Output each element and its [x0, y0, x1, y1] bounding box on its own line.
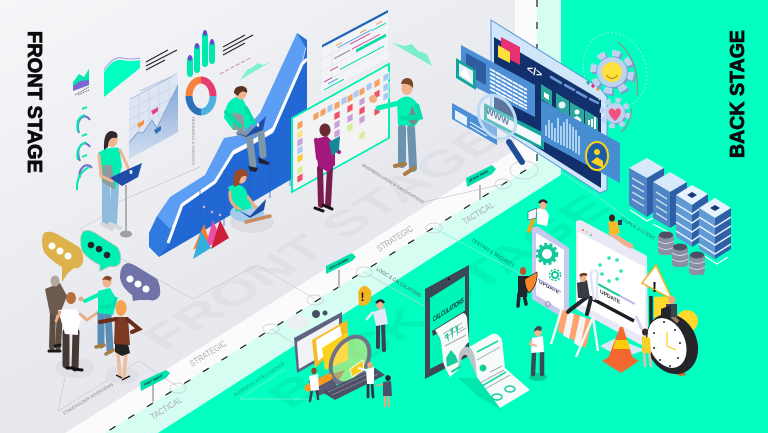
floor labels: STRATEGIC — [375, 223, 415, 254]
traffic cone — [602, 327, 639, 373]
icon: yellow and pink windows — [498, 37, 520, 65]
icon: warning bubble: ! — [360, 290, 364, 304]
keyboard — [322, 368, 385, 400]
person: grey-haired man — [45, 276, 67, 351]
icon: warning bubble — [358, 286, 371, 306]
chart: blue staircase growth graph — [149, 33, 307, 257]
floor labels: STRATEGIC — [188, 338, 228, 369]
magnifying glass — [471, 89, 523, 162]
barrier — [551, 305, 598, 357]
server stack 4 — [699, 198, 731, 259]
person: on clock — [661, 296, 678, 322]
floor labels: TESTING & SECURITY — [470, 238, 516, 270]
orange cylinder — [308, 377, 329, 388]
phone: update app: UPDATE — [539, 279, 559, 296]
phone: calculations — [425, 265, 469, 379]
spinner — [598, 256, 623, 283]
server rack 2 — [653, 172, 687, 228]
person: woman in yellow — [642, 328, 651, 366]
heading: FRONT STAGE: FRONT STAGE — [23, 31, 45, 173]
database cylinders — [658, 232, 705, 275]
signpost: centre — [326, 253, 356, 288]
icon: image tile — [456, 58, 476, 90]
floor labels — [62, 117, 656, 422]
panel: sticky note board — [292, 64, 389, 192]
chart: sparkline — [220, 57, 272, 80]
chart: donut — [189, 80, 213, 112]
search bar — [484, 103, 544, 150]
floor labels: SOURCE SYSTEMS — [619, 216, 656, 241]
floor labels: TACTICAL — [149, 395, 184, 422]
folder computer — [287, 310, 385, 400]
floor labels: STAKEHOLDER INTERVIEWS — [62, 382, 114, 416]
magnifying lens — [323, 330, 377, 390]
icon: gears — [573, 24, 657, 132]
speech bubble: green — [81, 231, 121, 271]
person: man in blue shirt — [366, 300, 388, 350]
person: man sitting on stairs — [224, 86, 270, 172]
clock with warning sign — [636, 265, 707, 382]
signpost: centre: HIGH-DOWN — [329, 257, 348, 271]
icon: colored triangles — [193, 206, 229, 259]
icon tiles — [541, 84, 598, 132]
signpost: right — [466, 165, 496, 200]
signpost: left: FAST SIGHT — [144, 373, 163, 387]
panel: code monitor — [452, 20, 620, 193]
chart: small area — [73, 69, 89, 95]
signpost: right: QUICK PEEK — [469, 169, 489, 183]
person: woman on monitor top — [608, 214, 631, 246]
clock with warning sign: ! — [652, 279, 657, 296]
floor outlines — [630, 210, 728, 264]
person: woman holding tablet — [529, 326, 547, 381]
person: man presenting — [369, 78, 421, 174]
dashboard chart panel — [541, 100, 620, 183]
phone: update app — [532, 226, 569, 318]
search bar: WWW — [486, 105, 509, 128]
navigation pills — [551, 77, 598, 103]
chart: line chart panel — [129, 74, 178, 159]
phone: calculations: CALCULATIONS — [433, 295, 464, 324]
monitor: update screen: UPDATE — [600, 289, 620, 306]
progress bar — [596, 283, 620, 296]
chat panel — [452, 103, 497, 145]
chart: green column bars — [188, 30, 253, 74]
person: guard with shield — [518, 267, 537, 306]
person: man in green shirt — [78, 276, 117, 354]
person: woman with skirt — [376, 375, 392, 407]
server rack 1 — [629, 158, 664, 217]
paper printout — [435, 313, 530, 410]
window control dots — [586, 81, 600, 91]
floor labels: RESEARCH & INSIGHTS — [191, 117, 196, 165]
server stack 3 — [676, 185, 708, 247]
floor labels: BUSINESS LOGIC & CALCULATIONS — [361, 163, 425, 205]
heading: BACK STAGE: BACK STAGE — [727, 30, 749, 158]
person: wrench mechanic — [568, 270, 598, 314]
chart: gantt panel — [322, 10, 388, 93]
watermark: FRONT STAGE: FRONT STAGE — [130, 118, 513, 357]
floor labels: TACTICAL — [461, 200, 496, 227]
code symbol: </> — [527, 63, 543, 81]
chart: faint mountains — [392, 43, 432, 66]
speech bubble: purple — [120, 263, 160, 301]
person: man with folder — [358, 362, 374, 397]
speech bubble: yellow — [42, 232, 83, 282]
chart: green area curve — [104, 50, 177, 97]
watermark: BACK STAGE: BACK STAGE — [255, 187, 621, 415]
floor labels: LOGIC & CALCULATIONS — [375, 267, 423, 300]
person: woman sitting cross-legged — [228, 169, 274, 233]
person: woman with laptop stand — [98, 131, 142, 238]
server towers — [629, 158, 731, 275]
person: man in white shirt — [56, 292, 97, 370]
text panel — [461, 45, 535, 117]
person: woman in brown jacket — [100, 300, 139, 380]
monitor: update screen — [576, 220, 648, 358]
person: on top of phone — [528, 200, 549, 231]
signpost: left — [140, 370, 170, 402]
person: woman in magenta — [315, 124, 340, 211]
people: stakeholder group — [45, 276, 139, 384]
connector lines — [58, 161, 655, 411]
icon: three arcs — [77, 107, 92, 190]
folders — [312, 320, 348, 370]
floor labels: BUSINESS INTELLIGENCE — [233, 361, 287, 399]
person: worker holding cylinder — [309, 368, 319, 401]
